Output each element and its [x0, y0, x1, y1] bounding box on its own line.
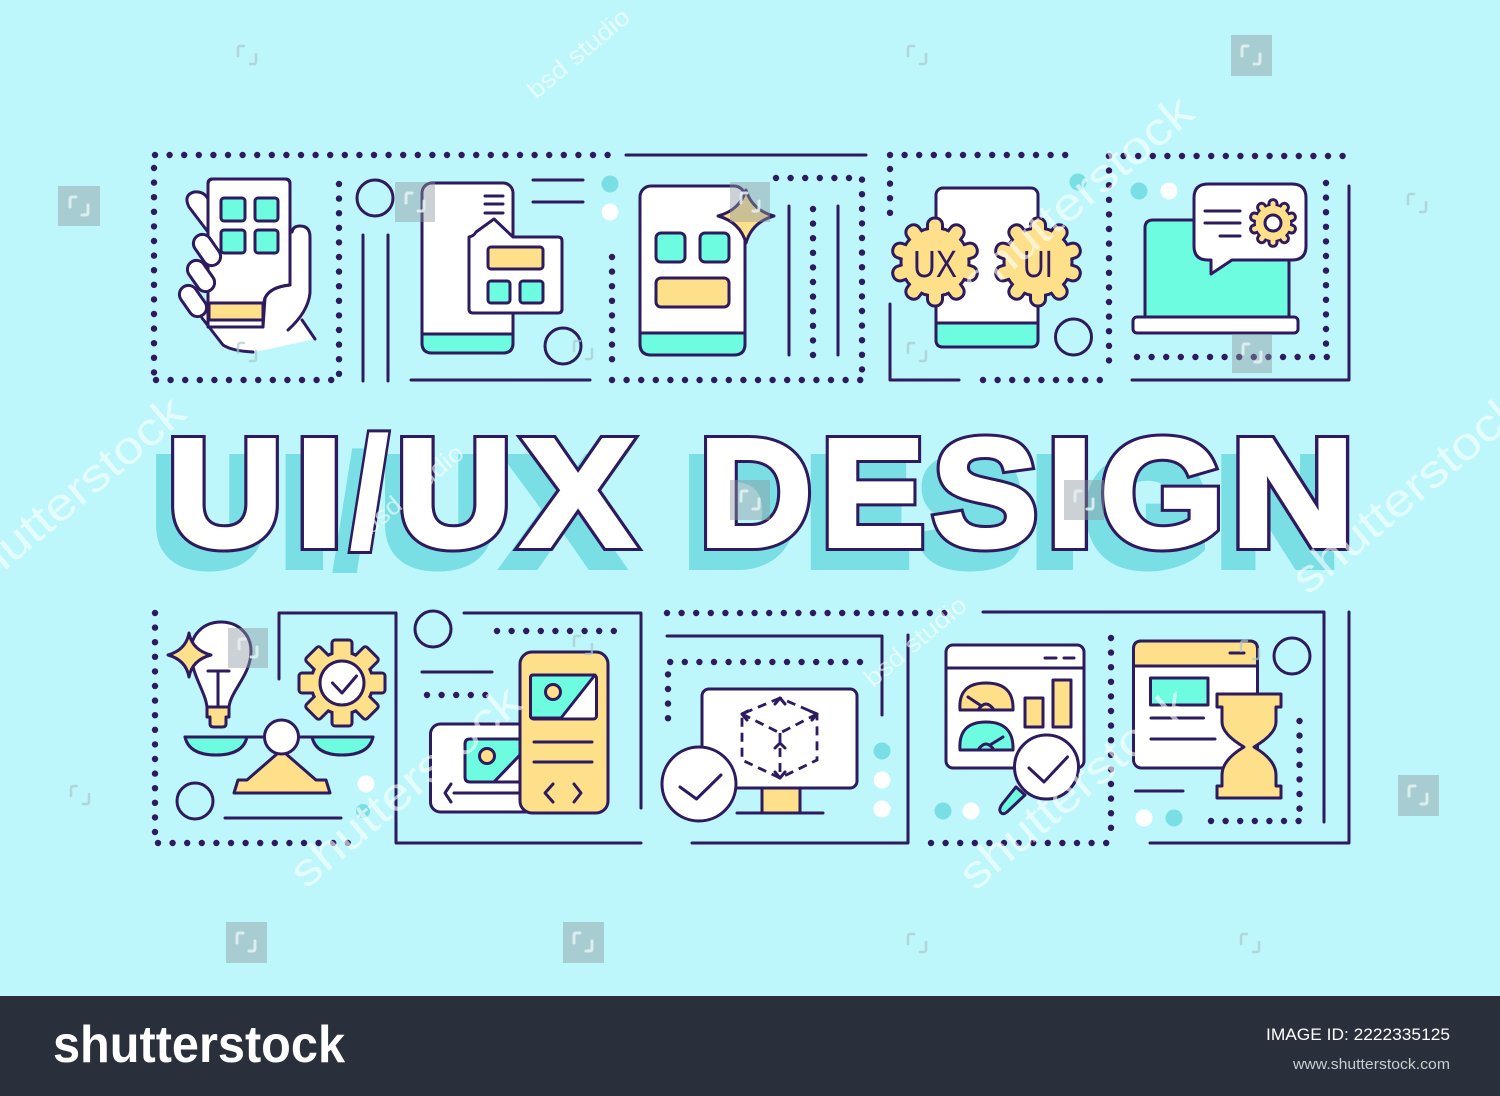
panel: responsive mobile layouts: [396, 611, 641, 843]
title shadow: U: [381, 427, 497, 598]
panel: phone with popup menu: [357, 155, 866, 381]
title: U: [167, 408, 283, 579]
speech bubble with gear: [1194, 184, 1306, 274]
title shadow: X: [507, 427, 619, 597]
title: /: [352, 408, 387, 578]
title: I: [295, 407, 343, 578]
title: U: [167, 408, 283, 579]
title: U: [396, 408, 512, 579]
title shadow: N: [1216, 427, 1340, 597]
title shadow: I: [280, 426, 328, 597]
title: I: [295, 407, 343, 578]
icon: light bulb: [168, 622, 251, 727]
title: X: [522, 408, 634, 578]
panel: idea balance with bulb, gear and scale: [155, 613, 396, 843]
title: D: [699, 407, 812, 578]
image id: IMAGE ID: 2222335125: [1266, 1025, 1450, 1044]
title: X: [522, 408, 634, 578]
title shadow: G: [1085, 428, 1209, 598]
title: N: [1231, 408, 1355, 578]
watermark: bsd studio: [522, 3, 636, 105]
title: E: [821, 407, 925, 578]
icon: UI gear: [994, 218, 1082, 306]
icon: UX gear: UX: [913, 244, 957, 286]
icon: gear with check: [299, 640, 385, 726]
watermark: shutterstock: [279, 674, 532, 898]
title: I: [1046, 408, 1093, 579]
title shadow: U: [152, 427, 268, 598]
title: N: [1231, 408, 1355, 578]
icon: balance scale: [185, 720, 373, 793]
icon: magnifier with check: [1000, 735, 1078, 814]
panel: mobile app layout: [612, 178, 862, 380]
panel: laptop with settings bubble: [1109, 156, 1350, 380]
title: D: [699, 407, 812, 578]
title: U: [396, 408, 512, 579]
gauge yellow: [960, 683, 1013, 710]
watermark: shutterstock: [1281, 380, 1500, 604]
panel: dashboard analytics: [931, 638, 1111, 843]
title: G: [1100, 409, 1224, 579]
panel: loading web page with hourglass: [983, 612, 1349, 843]
title shadow: D: [684, 426, 797, 597]
title: G: [1100, 409, 1224, 579]
title shadow: E: [806, 426, 910, 597]
title shadow: /: [337, 427, 372, 597]
footer bar: [0, 996, 1500, 1096]
title: S: [933, 408, 1038, 578]
icon: UX gear: [891, 218, 979, 306]
title: I: [1046, 408, 1093, 579]
panel: UX and UI gears on phone: [890, 155, 1109, 380]
title shadow: S: [918, 427, 1023, 597]
watermark: shutterstock: [951, 84, 1204, 308]
panel: hand holding phone: [154, 155, 612, 380]
icon: dashed cube: [742, 698, 817, 778]
back card: [430, 724, 536, 812]
title: E: [821, 407, 925, 578]
icon: hourglass: [1217, 694, 1281, 798]
title: S: [933, 408, 1038, 578]
website: www.shutterstock.com: [1292, 1057, 1450, 1073]
gauge teal: [960, 722, 1013, 750]
title: [167, 407, 1355, 579]
watermark: bsd studio: [859, 591, 973, 693]
title shadow: [152, 426, 1340, 598]
footer logo: shutterstock: [53, 1016, 345, 1074]
icon: hand holding phone: [176, 179, 315, 352]
icon: check circle: [662, 747, 736, 821]
watermark: shutterstock: [948, 676, 1201, 900]
title: /: [352, 408, 387, 578]
popup card: [469, 219, 562, 313]
yellow phone: [520, 652, 608, 813]
icon: UI gear: UI: [1023, 244, 1053, 286]
title shadow: I: [1031, 427, 1078, 598]
panel: 3D design on monitor: [662, 613, 946, 843]
watermark: bsd studio: [356, 439, 470, 541]
